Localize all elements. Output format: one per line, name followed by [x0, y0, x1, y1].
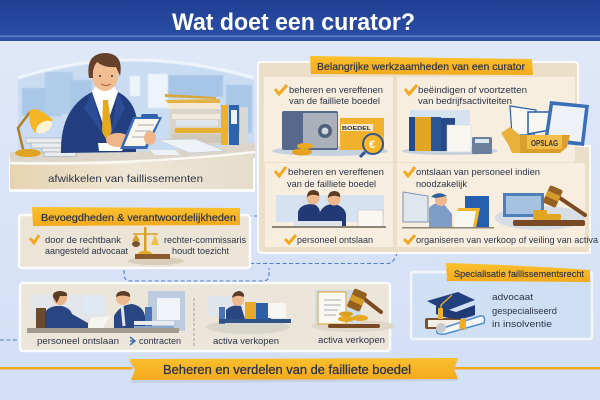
card: boedel beheren — [264, 77, 393, 162]
card text line 2: van de failliete boedel — [289, 96, 380, 106]
header band — [0, 0, 600, 41]
text: activa verkopen: activa verkopen — [213, 336, 279, 346]
panel: belangrijke werkzaamheden — [258, 56, 599, 253]
text: advocaat: aangesteld advocaat — [45, 246, 128, 256]
text: advocaat: advocaat — [492, 292, 533, 303]
panel: bevoegdheden — [19, 207, 250, 268]
icon: clipboard — [120, 114, 162, 149]
icon: check — [405, 85, 417, 94]
icon: paper stack left — [26, 138, 76, 156]
icon: two managers at desk — [272, 190, 386, 228]
icon: opslag box — [501, 101, 589, 153]
icon: check — [285, 235, 296, 243]
card text: ontslaan van personeel indien — [416, 167, 540, 177]
card text line 2: van de failliete boedel — [287, 179, 376, 189]
banner: specialisatie — [446, 263, 590, 282]
sub caption: personeel ontslaan — [297, 235, 373, 245]
text: toezicht: houdt toezicht — [172, 246, 230, 256]
icon: safe, boedel folder and magnifier: € — [369, 139, 375, 151]
icon: arrow — [130, 337, 135, 345]
icon: desk lamp — [15, 109, 54, 157]
scene: veiling — [311, 288, 395, 332]
divider — [193, 298, 195, 348]
scene: dossierkast — [206, 291, 291, 334]
icon: graduation cap with diploma — [425, 292, 484, 334]
icon: gavel, monitor and coins — [495, 185, 585, 230]
text: personeel ontslaan: personeel ontslaan — [37, 336, 119, 347]
icon: check — [30, 235, 39, 243]
card text: beëindigen of voortzetten — [418, 85, 527, 95]
desk — [10, 143, 255, 163]
office backdrop — [18, 60, 254, 158]
caption strip — [10, 154, 253, 189]
text: rechter-commissaris: rechter-commissaris — [164, 235, 246, 245]
banner: specialisatie: Specialisatie faillissementsrecht — [454, 269, 585, 279]
caption: afwikkelen van faillissementen — [48, 173, 203, 185]
icon: scales of justice — [128, 227, 184, 265]
banner: werkzaamheden — [310, 56, 533, 75]
card text: beheren en vereffenen — [289, 85, 383, 95]
icon: safe, boedel folder and magnifier — [272, 111, 388, 157]
scene: contracten gesprek — [27, 291, 185, 333]
title: Wat doet een curator? — [172, 9, 415, 36]
icon: binders and calculator — [402, 110, 498, 155]
icon: safe, boedel folder and magnifier: BOEDEL — [342, 126, 372, 132]
card text line 2: van bedrijfsactiviteiten — [418, 96, 512, 106]
panel: afwikkelen van faillissementen — [9, 53, 255, 192]
ribbon text: Beheren en verdelen van de failliete boedel — [163, 363, 411, 377]
sub caption: organiseren van verkoop of veiling van activa — [416, 235, 599, 245]
bottom ribbon — [0, 358, 600, 383]
panel: specialisatie — [411, 263, 592, 339]
text: gespecialiseerd: gespecialiseerd — [492, 306, 557, 317]
icon: check — [404, 167, 415, 176]
banner: bevoegdheden: Bevoegdheden & verantwoordelijkheden — [41, 212, 236, 224]
card: personeel ontslaan — [265, 163, 393, 247]
text: activa verkopen 2: activa verkopen — [318, 335, 385, 345]
icon: check — [404, 235, 415, 243]
card: bedrijfsactiviteiten — [397, 77, 589, 162]
text: in insolventie: in insolventie — [492, 319, 552, 330]
panel: taken onderaan — [20, 283, 395, 351]
icon: stacked files and binders — [150, 94, 248, 155]
card text line 2: noodzakelijk — [416, 179, 467, 189]
banner: bevoegdheden — [32, 207, 240, 226]
curator figure — [61, 53, 137, 153]
banner: werkzaamheden: Belangrijke werkzaamheden van een curator — [317, 61, 525, 73]
text: contracten: contracten — [139, 336, 181, 346]
icon: check — [275, 167, 286, 176]
icon: worker with monitor and binder — [402, 192, 494, 228]
card text: beheren en vereffenen — [288, 167, 384, 177]
card: ontslaan en veiling — [397, 163, 599, 247]
text: rechtbank: door de rechtbank — [45, 235, 122, 245]
icon: opslag box: OPSLAG — [531, 139, 558, 148]
icon: check — [275, 85, 287, 94]
dashed connectors — [0, 216, 397, 340]
